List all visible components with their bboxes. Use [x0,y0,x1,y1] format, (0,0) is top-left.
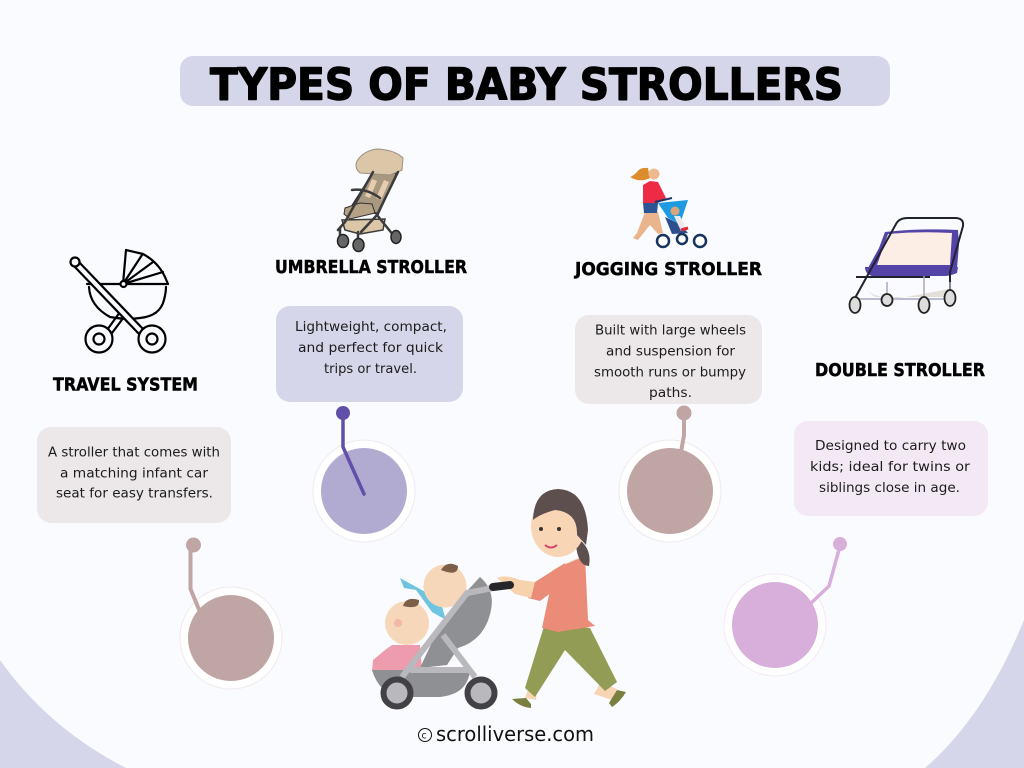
description card: Lightweight, compact, [295,320,447,335]
description card [276,306,463,402]
panel: travel system [37,250,282,689]
illustration: mother pushing twin babies in stroller [372,489,626,708]
description card: trips or travel. [324,362,417,377]
description card [37,427,231,523]
description card: Designed to carry two [815,439,966,454]
icon: pram [70,250,168,352]
background corner: bottom right [925,620,1024,768]
panel: jogging stroller [573,168,762,542]
stroller and babies [372,564,510,706]
description card: and perfect for quick [298,341,443,356]
icon: beige stroller [338,149,403,252]
description card [794,421,988,516]
description card: kids; ideal for twins or [810,460,971,475]
heading: UMBRELLA STROLLER [275,257,467,278]
description card: smooth runs or bumpy [594,366,746,380]
heading: DOUBLE STROLLER [815,360,985,381]
title banner: TYPES OF BABY STROLLERS [210,60,843,110]
connector and circle [619,406,721,542]
description card: Built with large wheels [595,324,746,338]
credit: scrolliverse.com: scrolliverse.com [436,722,594,746]
description card: paths. [649,386,692,401]
heading: JOGGING STROLLER [573,259,762,280]
description card [575,315,762,404]
icon: purple double stroller [850,218,963,313]
description card: siblings close in age. [819,481,960,496]
mother [497,489,626,708]
description card: a matching infant car [60,466,209,482]
background corner: bottom left [0,660,126,768]
panel: umbrella stroller [275,149,467,542]
heading: TRAVEL SYSTEM [53,374,198,396]
icon: woman jogging with stroller [630,168,706,247]
connector and circle [724,537,847,676]
credit: scrolliverse.com: c [422,730,427,742]
panel: double stroller [724,218,988,676]
connector and circle [313,406,415,542]
description card: and suspension for [606,344,736,360]
description card: A stroller that comes with [48,446,220,460]
connector and circle [180,538,282,689]
description card: seat for easy transfers. [56,486,213,502]
